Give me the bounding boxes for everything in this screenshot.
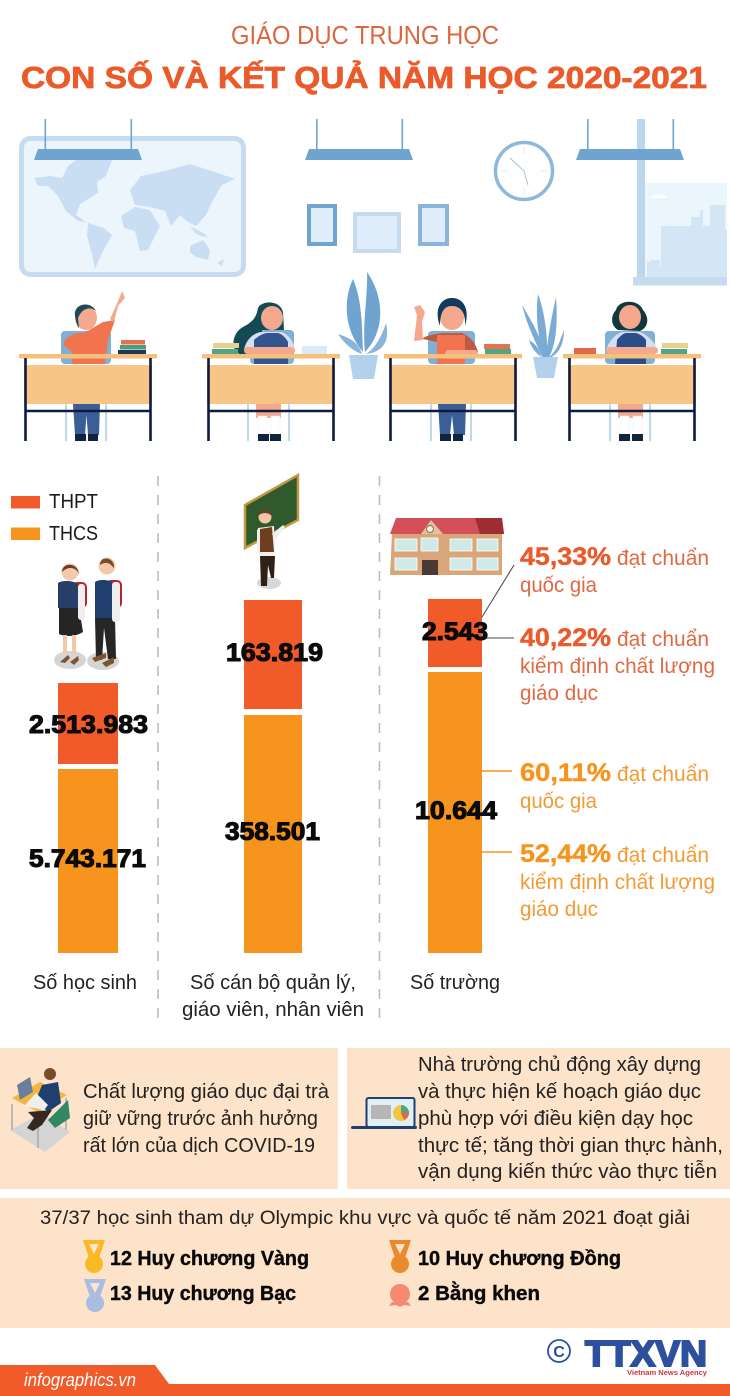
icon: picture frames [309, 206, 447, 251]
student desk 1: boy raising hand [19, 291, 157, 441]
bar chart: so can bo: giáo viên, nhân viên [182, 999, 364, 1021]
bar chart: so truong [410, 565, 514, 994]
bar chart: so truong: 2.543 [422, 618, 488, 646]
classroom illustration [19, 119, 727, 441]
bar chart: so can bo: 163.819 [226, 639, 323, 667]
icon: student at laptop [10, 1068, 70, 1152]
logo: TTXVN: Vietnam News Agency [627, 1370, 707, 1377]
callouts: THPT percentages: 45,33% [520, 543, 611, 571]
icon: ceiling lamps [34, 119, 674, 160]
panel: education quality [0, 1048, 338, 1189]
bar chart: so can bo [182, 600, 364, 1021]
panel: olympic results: 13 Huy chương Bạc [110, 1283, 296, 1305]
bar chart: so hoc sinh [29, 683, 148, 994]
callouts: THCS percentages: 52,44% [520, 840, 611, 868]
panel: olympic results: 2 Bằng khen [418, 1281, 540, 1305]
bar chart: so truong: Số trường [410, 972, 500, 994]
panel: education quality: giữ vững trước ảnh hưởng [83, 1108, 318, 1130]
panel: olympic results: 37/37 học sinh tham dự Olympic khu vực và quốc tế năm 2021 đoạt giải [40, 1208, 690, 1229]
panel: education quality: rất lớn của dịch COVID-19 [83, 1135, 315, 1157]
student desk 4: girl with curly hair [563, 302, 701, 441]
panel: school planning [347, 1048, 730, 1189]
callouts: THPT percentages [520, 543, 715, 705]
student desk 2: girl with long hair [202, 302, 340, 441]
callouts: THPT percentages: 40,22% [520, 624, 611, 652]
callouts: THPT percentages: quốc gia [520, 574, 597, 597]
panel: school planning: Nhà trường chủ động xây dựng [418, 1054, 701, 1076]
panel: olympic results: 10 Huy chương Đồng [418, 1248, 621, 1270]
logo: TTXVN: TTXVN [585, 1333, 707, 1374]
icon: bronze medal [389, 1240, 411, 1273]
legend: THCS [49, 523, 98, 545]
callouts: THCS percentages: quốc gia [520, 790, 597, 813]
bar chart: so can bo: 358.501 [225, 818, 320, 846]
logo: TTXVN: C [553, 1344, 565, 1361]
icon: two students [54, 558, 122, 670]
callouts: THCS percentages: kiểm định chất lượng [520, 871, 715, 894]
icon: plant left [338, 272, 387, 379]
footer band [0, 1365, 730, 1396]
icon: school building [390, 518, 504, 575]
callouts: THPT percentages: kiểm định chất lượng [520, 655, 715, 678]
title: GIÁO DỤC TRUNG HỌC [231, 20, 499, 50]
callouts: THCS percentages: giáo dục [520, 898, 598, 921]
icon: certificate rosette [389, 1284, 411, 1307]
panel: olympic results [0, 1198, 730, 1328]
callouts: THPT percentages: đạt chuẩn [617, 628, 709, 651]
icon: wall clock [496, 142, 552, 200]
callouts: THCS percentages: đạt chuẩn [617, 763, 709, 786]
icon: window with city view [576, 119, 727, 286]
student desk 3: boy waving [384, 298, 522, 441]
logo: TTXVN [548, 1333, 707, 1377]
callouts: THPT percentages: giáo dục [520, 682, 598, 705]
title: CON SỐ VÀ KẾT QUẢ NĂM HỌC 2020-2021 [21, 59, 707, 95]
footer band: infographics.vn [24, 1370, 136, 1390]
panel: education quality: Chất lượng giáo dục đại trà [83, 1081, 330, 1103]
bar chart: so hoc sinh: 5.743.171 [29, 845, 146, 873]
icon: world map [22, 138, 244, 274]
legend [11, 491, 98, 545]
icon: laptop with chart [351, 1098, 417, 1129]
panel: olympic results: 12 Huy chương Vàng [110, 1248, 309, 1270]
callouts: THCS percentages: đạt chuẩn [617, 844, 709, 867]
icon: plant right [522, 294, 564, 378]
panel: school planning: thực tế; tăng thời gian thực hành, [418, 1135, 723, 1157]
icon: silver medal [84, 1279, 106, 1312]
panel: school planning: phù hợp với điều kiện dạy học [418, 1108, 693, 1130]
panel: school planning: vận dụng kiến thức vào thực tiễn [418, 1160, 717, 1183]
bar chart: so hoc sinh: Số học sinh [33, 972, 137, 994]
legend: THPT [49, 491, 98, 513]
callouts: THCS percentages: 60,11% [520, 759, 611, 787]
bar chart: so truong: 10.644 [415, 797, 497, 825]
icon: teacher at blackboard [245, 475, 298, 589]
bar chart: so can bo: Số cán bộ quản lý, [190, 972, 356, 994]
icon: gold medal [83, 1240, 105, 1273]
title [21, 20, 707, 95]
callouts: THCS percentages [520, 759, 715, 921]
bar chart: so hoc sinh: 2.513.983 [29, 711, 148, 739]
panel: school planning: và thực hiện kế hoạch giáo dục [418, 1081, 701, 1103]
callouts: THPT percentages: đạt chuẩn [617, 547, 709, 570]
